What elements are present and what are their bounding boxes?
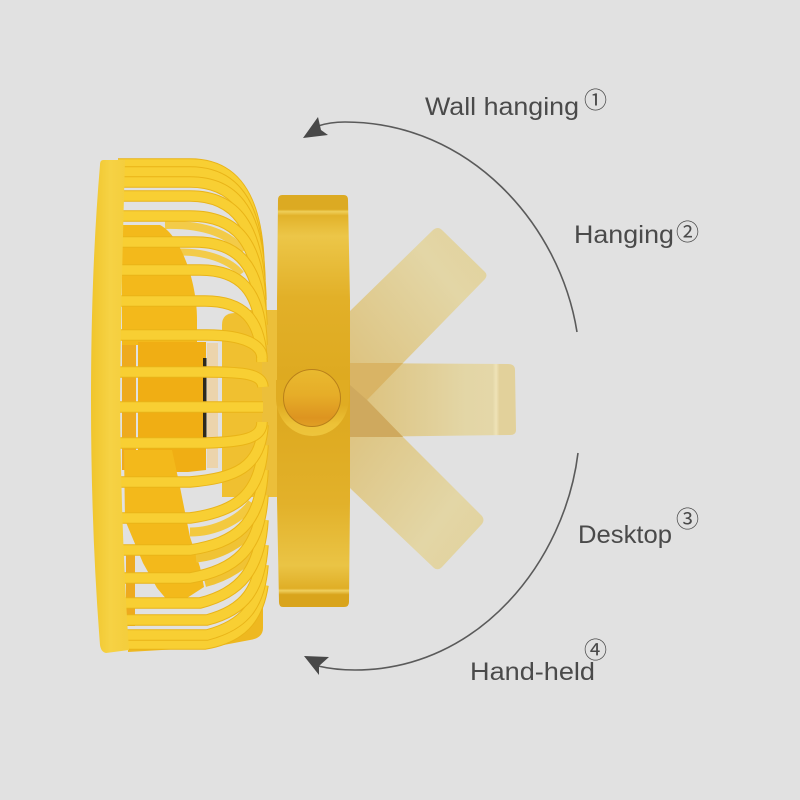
motor neck xyxy=(250,310,278,497)
label: desktop xyxy=(578,500,699,549)
rear rib lower 2 xyxy=(196,525,255,558)
fan blade fragment near rim xyxy=(126,550,135,626)
label: wall hanging xyxy=(425,81,607,121)
label: hand-held: ④ xyxy=(584,631,607,665)
arrow: top curved arrow xyxy=(303,117,577,332)
fan blade middle xyxy=(138,342,206,472)
label: wall hanging: ① xyxy=(584,81,607,115)
ghost handles: rotated positions xyxy=(350,228,516,569)
ghost handle: upper xyxy=(350,228,486,400)
fan hub left xyxy=(122,345,136,470)
fan cage ribs xyxy=(118,164,263,644)
ghost handle: lower xyxy=(350,387,484,569)
label: desktop: Desktop xyxy=(578,521,672,549)
label: hand-held: Hand-held xyxy=(470,658,595,686)
label: hand-held xyxy=(470,631,607,686)
label: hanging: ② xyxy=(676,213,699,247)
circuit strip xyxy=(207,343,218,468)
fan blade upper xyxy=(122,225,197,345)
hinge ring xyxy=(276,380,349,436)
hinge button xyxy=(284,370,340,426)
fan blade lower xyxy=(124,450,204,607)
rear rib middle xyxy=(180,252,241,274)
rear rib lower 3 xyxy=(205,545,258,583)
fan front rim xyxy=(91,160,129,653)
rear rib upper xyxy=(165,225,242,252)
label: wall hanging: Wall hanging xyxy=(425,93,579,121)
ghost overlap shading xyxy=(350,363,403,437)
rear rib lower 1 xyxy=(190,503,252,532)
circuit dark strip xyxy=(203,358,206,440)
arrow: bottom curved arrow xyxy=(304,453,578,675)
label: hanging: Hanging xyxy=(574,221,674,249)
label: desktop: ③ xyxy=(676,500,699,534)
label: hanging xyxy=(574,213,699,249)
fan cage interior xyxy=(122,225,278,652)
handle body xyxy=(277,195,350,607)
upright handle xyxy=(276,195,350,607)
rear base bottom xyxy=(128,590,263,652)
ghost handle: horizontal xyxy=(350,363,516,437)
rear housing xyxy=(222,313,262,497)
